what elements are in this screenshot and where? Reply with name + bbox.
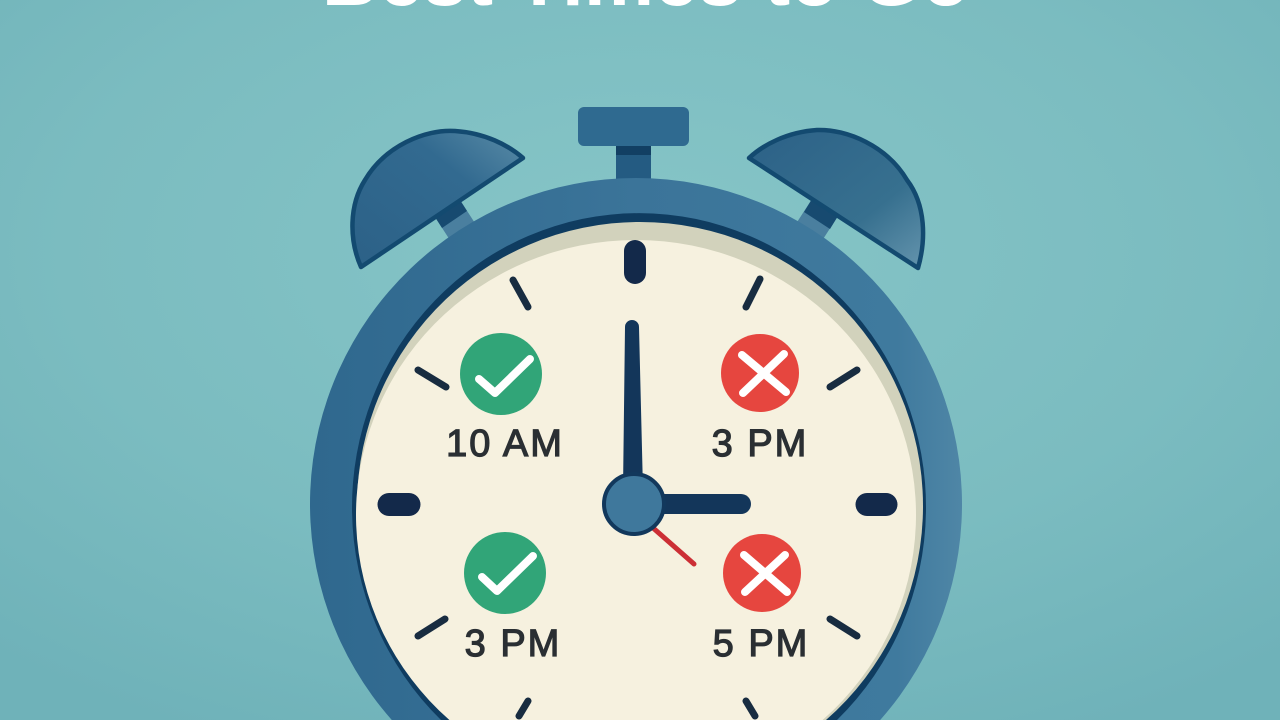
label: 10 AM: 10 AM xyxy=(446,423,564,465)
hub xyxy=(604,474,664,534)
label: 5 PM: 5 PM xyxy=(713,623,809,665)
label: 3 PM bottom: 3 PM xyxy=(465,623,561,665)
top button xyxy=(578,107,689,180)
right bell xyxy=(749,130,923,268)
label: 3 PM top: 3 PM xyxy=(712,423,808,465)
icon: green check 10 AM xyxy=(460,333,542,415)
minute hand xyxy=(623,320,643,490)
left bell xyxy=(352,131,523,267)
clock face xyxy=(356,222,923,720)
icon: red cross 5 PM xyxy=(723,534,801,612)
icon: green check 3 PM xyxy=(464,532,546,614)
dark inner rim xyxy=(352,213,926,720)
hour ticks xyxy=(389,251,886,716)
icon: red cross 3 PM xyxy=(721,334,799,412)
icon: alarm clock xyxy=(310,107,962,720)
hour hand xyxy=(650,494,751,514)
second hand xyxy=(652,527,694,564)
clock case xyxy=(310,178,962,720)
